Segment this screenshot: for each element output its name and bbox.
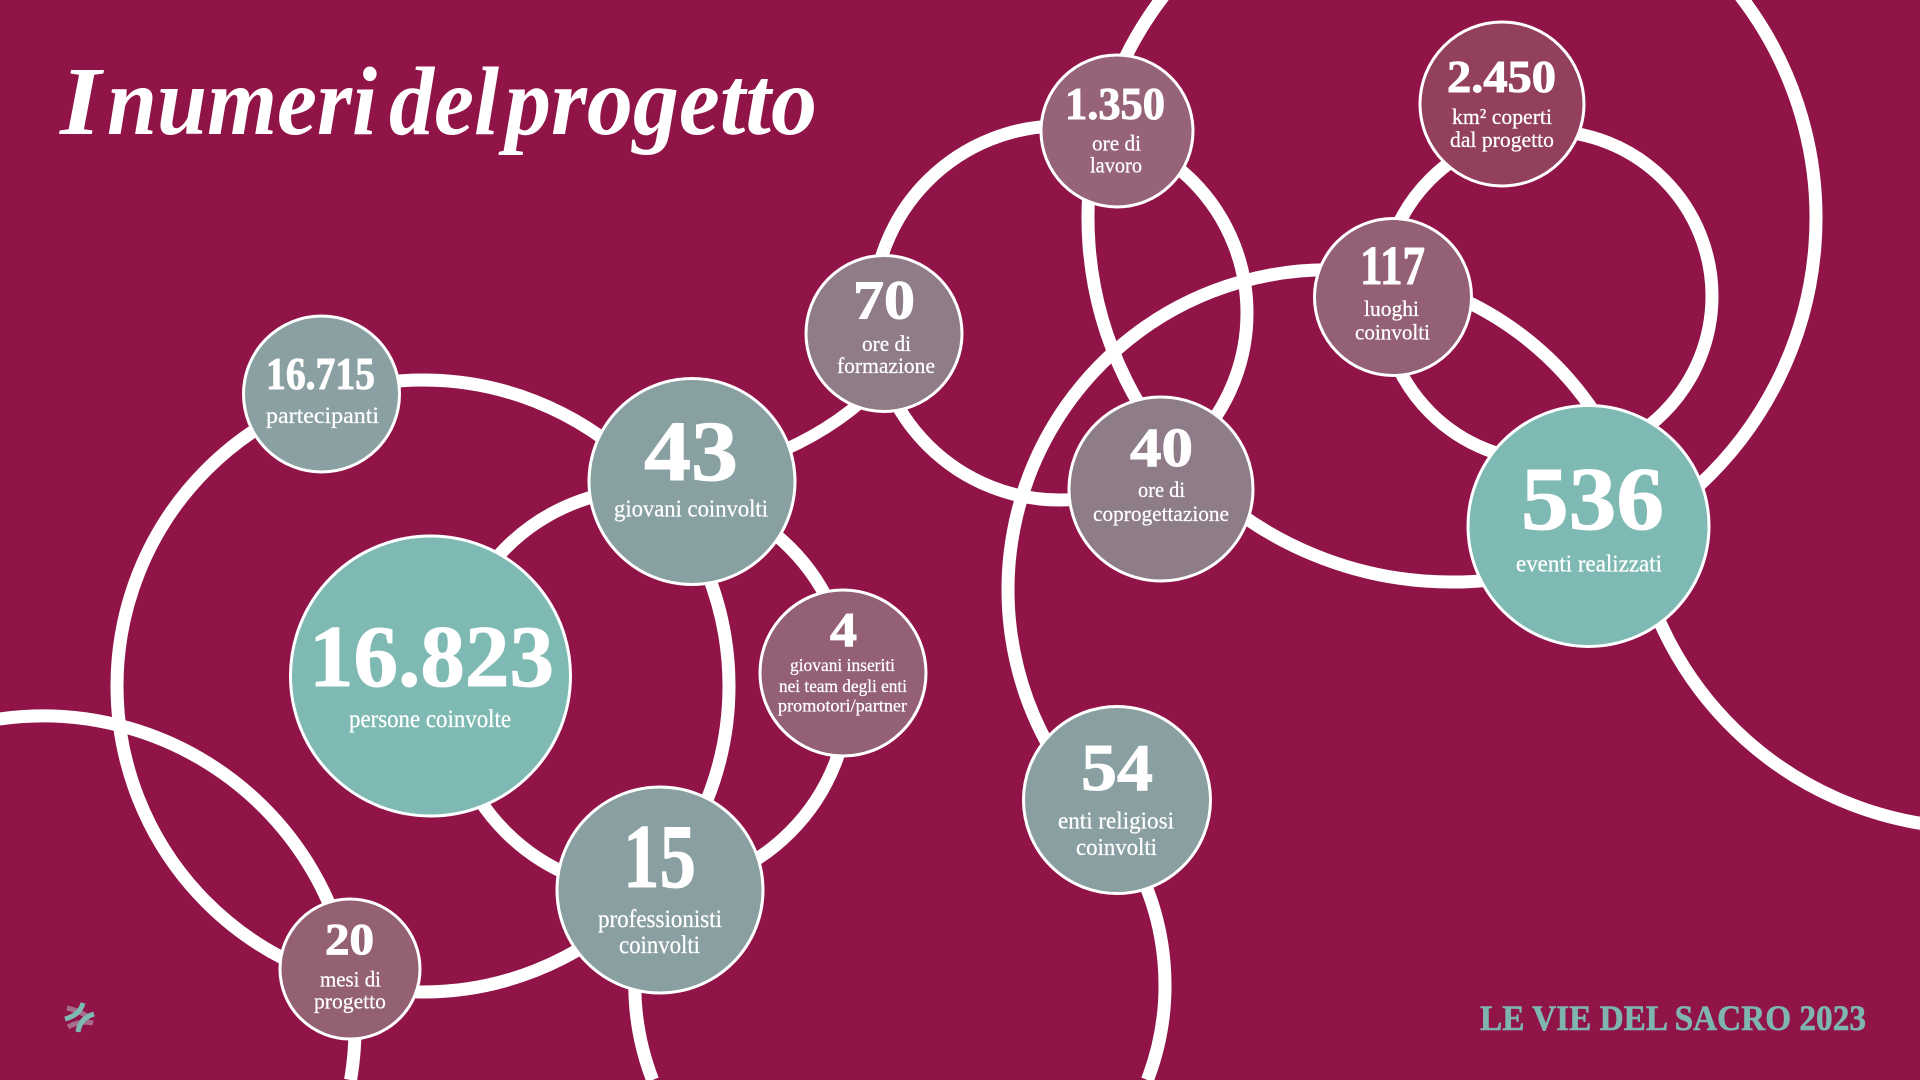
node: 1.350 ore di lavoro — [1041, 55, 1193, 207]
node: 536 eventi realizzati: eventi realizzati — [1516, 552, 1662, 578]
node: 117 luoghi coinvolti — [1314, 218, 1472, 376]
node: 16.823 persone coinvolte — [290, 536, 570, 816]
node: 4 giovani inseriti: giovani inseriti — [790, 655, 895, 675]
ring: left large — [117, 380, 729, 992]
footer: project name: LE VIE DEL SACRO 2023 — [1480, 998, 1866, 1038]
node: 16.715 partecipanti: 16.715 — [266, 348, 375, 399]
node: 2.450 km² coperti: dal progetto — [1450, 127, 1554, 152]
node: 16.823 persone coinvolte: persone coinvolte — [349, 706, 511, 733]
node: 2.450 km² coperti: 2.450 — [1447, 51, 1556, 102]
node: 536 eventi realizzati — [1468, 406, 1709, 646]
node: 43 giovani coinvolti: giovani coinvolti — [614, 496, 768, 522]
node: 20 mesi di progetto: mesi di — [320, 966, 381, 992]
node: 1.350 ore di lavoro: lavoro — [1090, 152, 1142, 178]
node: 43 giovani coinvolti: 43 — [644, 403, 738, 499]
node: 2.450 km² coperti — [1420, 22, 1584, 186]
node: 1.350 ore di lavoro: ore di — [1092, 130, 1141, 156]
node: 117 luoghi coinvolti: 117 — [1360, 235, 1425, 296]
node: 43 giovani coinvolti — [589, 378, 795, 584]
node: 4 giovani inseriti: 4 — [830, 602, 857, 657]
node: 54 enti religiosi: enti religiosi — [1058, 808, 1174, 834]
node: 40 ore di coprogettazione: 40 — [1130, 417, 1193, 478]
node: 20 mesi di progetto: progetto — [314, 988, 386, 1014]
node: 15 professionisti coinvolti — [557, 787, 763, 993]
node: 4 giovani inseriti: nei team degli enti — [779, 676, 907, 696]
node: 15 professionisti coinvolti: coinvolti — [619, 932, 700, 959]
node: 40 ore di coprogettazione — [1069, 397, 1253, 581]
ring: bottom left — [0, 716, 355, 1080]
arc: bottom from 15 — [635, 960, 653, 1080]
node: 117 luoghi coinvolti: coinvolti — [1355, 320, 1430, 344]
node: 117 luoghi coinvolti: luoghi — [1364, 296, 1419, 321]
node: 16.715 partecipanti: partecipanti — [266, 403, 379, 428]
node: 2.450 km² coperti: km² coperti — [1452, 104, 1552, 129]
ring: 2.450, 117 and 536 — [1382, 131, 1712, 461]
ring: inner left — [447, 489, 849, 891]
arc: 536 to right edge — [1639, 560, 1920, 825]
node: 70 ore di formazione — [806, 256, 962, 412]
ring: centre from 54 to 536 — [1008, 270, 1648, 760]
node: 20 mesi di progetto: 20 — [325, 915, 374, 964]
arc: bottom from 54 — [1128, 850, 1165, 1080]
node: 70 ore di formazione: formazione — [837, 353, 935, 378]
ring: 70, 1.350 and 40 — [873, 126, 1247, 500]
icon: logo mark — [65, 1003, 94, 1032]
node: 70 ore di formazione: ore di — [862, 331, 911, 356]
node: 536 eventi realizzati: 536 — [1521, 450, 1664, 549]
node: 54 enti religiosi: coinvolti — [1076, 835, 1157, 861]
arc: 43 to 70 — [770, 392, 872, 456]
node: 70 ore di formazione: 70 — [853, 270, 915, 330]
node: 40 ore di coprogettazione: coprogettazione — [1093, 501, 1229, 526]
title: I — [59, 48, 104, 156]
title: progetto — [498, 48, 817, 156]
node: 16.715 partecipanti — [244, 316, 400, 472]
node: 20 mesi di progetto — [280, 899, 420, 1039]
title: del — [389, 48, 500, 156]
node: 4 giovani inseriti: promotori/partner — [778, 696, 907, 716]
node: 4 giovani inseriti — [760, 590, 926, 756]
node: 1.350 ore di lavoro: 1.350 — [1065, 79, 1165, 129]
node: 16.823 persone coinvolte: 16.823 — [309, 609, 554, 706]
title — [59, 48, 817, 156]
node: 54 enti religiosi: 54 — [1081, 731, 1153, 805]
node: 15 professionisti coinvolti: professionisti — [598, 906, 722, 933]
node: 54 enti religiosi — [1024, 706, 1210, 894]
title: numeri — [107, 48, 377, 156]
node: 15 professionisti coinvolti: 15 — [623, 806, 696, 907]
ring: outer top right — [1088, 0, 1816, 582]
node: 40 ore di coprogettazione: ore di — [1138, 477, 1185, 502]
